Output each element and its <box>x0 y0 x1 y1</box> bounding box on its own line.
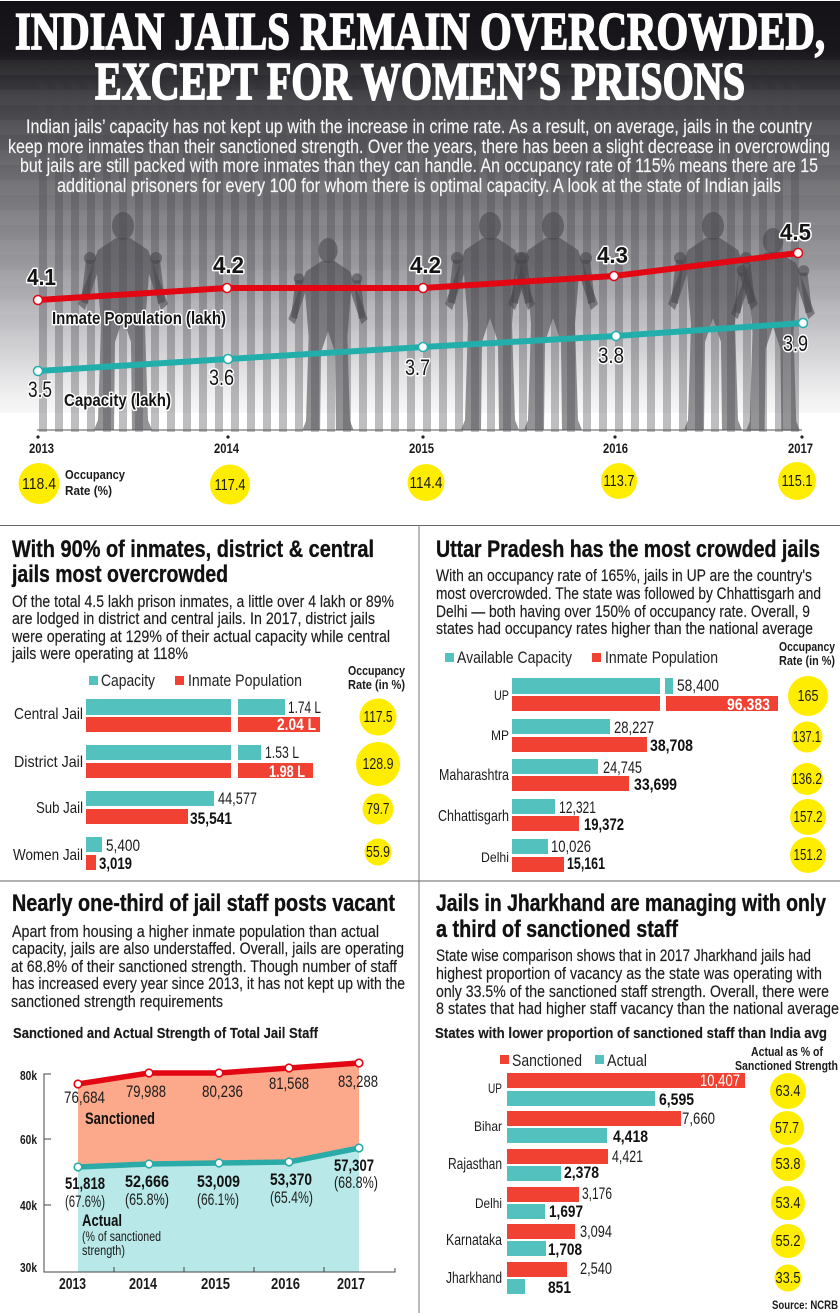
percentage header: Actual as % of <box>751 1044 824 1059</box>
line: capacity: 3.9 <box>783 331 808 356</box>
bar chart: states occupancy: Chhattisgarh <box>438 808 509 825</box>
occupancy circles: 137.1 <box>793 729 821 746</box>
bar chart: state staff: 7,660 <box>682 1110 715 1128</box>
time axis: 2015 <box>409 440 434 456</box>
occupancy rate circles: 113.7 <box>604 473 635 490</box>
line: inmate population: 4.5 <box>780 219 811 245</box>
percentage circles: 53.4 <box>776 1195 801 1212</box>
area line chart: staff strength: 80k <box>20 1069 37 1083</box>
legend <box>89 672 302 690</box>
occupancy circles: 128.9 <box>362 756 394 773</box>
bar chart: states occupancy: Delhi <box>481 849 509 865</box>
bar chart: jail types: 1.98 L <box>269 763 305 781</box>
area line chart: staff strength: 2014 <box>129 1276 157 1293</box>
line: capacity: 3.8 <box>598 343 624 368</box>
area line chart: staff strength: 2017 <box>337 1276 365 1293</box>
line: inmate population: 4.3 <box>597 242 628 268</box>
occupancy circles: 151.2 <box>794 847 823 864</box>
bar chart: jail types: 2.04 L <box>277 716 316 734</box>
bar chart: states occupancy <box>438 677 778 873</box>
percentage circles: 57.7 <box>775 1120 799 1137</box>
title <box>15 3 825 111</box>
legend: Capacity <box>101 672 156 690</box>
prisoner silhouettes <box>78 212 815 431</box>
occupancy rate circles: 115.1 <box>782 473 813 490</box>
percentage circles <box>770 1073 806 1292</box>
body text: sanctioned strength requirements <box>11 993 223 1011</box>
occupancy circles: 79.7 <box>366 801 390 818</box>
area line chart: staff strength: 40k <box>20 1199 37 1213</box>
area line chart: staff strength: (65.8%) <box>125 1191 169 1209</box>
bar chart: state staff: 3,094 <box>580 1223 612 1241</box>
body text: capacity, jails are also understaffed. Overall, jails are operating <box>12 940 404 958</box>
body text <box>11 923 405 1011</box>
area line chart: staff strength: 2015 <box>201 1276 230 1293</box>
legend: Available Capacity <box>457 649 573 667</box>
area line chart: staff strength: 81,568 <box>269 1075 309 1093</box>
occupancy header: Occupancy <box>348 663 406 678</box>
bar chart: states occupancy: 19,372 <box>584 816 624 834</box>
occupancy rate circles: 118.4 <box>22 476 56 493</box>
percentage circles: 55.2 <box>776 1233 801 1250</box>
area line chart: staff strength: (66.1%) <box>197 1191 239 1209</box>
panel: Uttar Pradesh <box>436 536 836 873</box>
percentage header <box>735 1044 838 1073</box>
bar chart: jail types <box>13 699 321 873</box>
bar chart: states occupancy: 15,161 <box>567 855 605 873</box>
bar chart: state staff: 10,407 <box>700 1072 740 1090</box>
body text: has increased every year since 2013, it has not kept up with the <box>12 975 405 993</box>
heading <box>11 536 374 588</box>
legend: Sanctioned <box>512 1052 582 1070</box>
bar chart: jail types: 44,577 <box>218 790 257 808</box>
area line chart: staff strength: (65.4%) <box>270 1189 313 1207</box>
occupancy circles: 55.9 <box>366 844 390 861</box>
bar chart: states occupancy: 58,400 <box>677 677 719 695</box>
bar chart: state staff: Bihar <box>474 1118 502 1134</box>
panel: Jharkhand staff <box>435 890 839 1312</box>
line: inmate population: 4.1 <box>27 264 56 290</box>
area line chart: staff strength: 79,988 <box>126 1083 166 1101</box>
body text <box>436 567 821 638</box>
occupancy rate circles: 117.4 <box>214 477 246 494</box>
occupancy header <box>779 639 836 668</box>
area line chart: staff strength: (% of sanctioned <box>82 1229 161 1244</box>
area line chart: staff strength: 83,288 <box>338 1073 378 1091</box>
occupancy rate circles: Rate (%) <box>65 483 112 498</box>
body text: were operating at 129% of their actual capacity while central <box>11 628 390 646</box>
bar chart: jail types: 3,019 <box>99 855 132 873</box>
legend: Inmate Population <box>605 649 718 667</box>
percentage circles: 63.4 <box>776 1083 801 1100</box>
area line chart: staff strength: 57,307 <box>334 1157 374 1175</box>
panel: header with jail background and trend chart <box>0 1 840 504</box>
line: capacity: 3.7 <box>405 355 430 380</box>
bar chart: state staff: 4,418 <box>613 1128 648 1146</box>
body text: at 68.8% of their sanctioned strength. Though number of staff <box>11 958 397 976</box>
area line chart: staff strength: 80,236 <box>202 1083 243 1101</box>
prison bars <box>39 150 799 432</box>
bar chart: states occupancy: 28,227 <box>614 719 654 737</box>
area line chart: staff strength: 2016 <box>271 1276 300 1293</box>
panel dividers <box>0 525 840 1313</box>
bar chart: state staff: 1,697 <box>549 1203 583 1221</box>
heading <box>436 890 827 943</box>
line: capacity: 3.5 <box>28 377 52 402</box>
bar chart: jail types: 1.53 L <box>265 744 299 762</box>
area line chart: staff strength: 30k <box>20 1261 37 1275</box>
occupancy circles: 117.5 <box>364 709 393 726</box>
bar chart: state staff: UP <box>488 1080 502 1096</box>
area line chart: staff strength: (68.8%) <box>334 1174 378 1192</box>
bar chart: state staff: 1,708 <box>548 1241 582 1259</box>
bar chart: states occupancy: 96,383 <box>727 696 770 714</box>
heading: a third of sanctioned staff <box>436 916 679 943</box>
body text: are lodged in district and central jails. In 2017, district jails <box>12 610 375 628</box>
heading: Nearly one-third of jail staff posts vacant <box>12 890 395 917</box>
bar chart: jail types: Sub Jail <box>36 800 83 817</box>
line: inmate population: 4.2 <box>213 252 244 278</box>
bar chart: states occupancy: 33,699 <box>634 776 677 794</box>
area line chart: staff strength: 51,818 <box>65 1175 105 1193</box>
occupancy circles <box>356 698 400 866</box>
bar chart: state staff: Delhi <box>475 1195 502 1211</box>
occupancy header <box>348 663 406 692</box>
heading: jails most overcrowded <box>11 561 228 588</box>
time axis: 2016 <box>603 440 628 456</box>
line: capacity: 3.6 <box>209 365 234 390</box>
bar chart: states occupancy: 10,026 <box>551 838 591 856</box>
line: inmate population: Inmate Population (lakh) <box>52 308 226 328</box>
bar chart: jail types: Central Jail <box>14 706 83 723</box>
heading: With 90% of inmates, district & central <box>12 536 374 563</box>
bar chart: state staff: 2,378 <box>564 1164 599 1182</box>
bar chart: state staff: 4,421 <box>612 1148 643 1166</box>
bar chart: jail types: Women Jail <box>13 847 83 864</box>
occupancy header: Rate (in %) <box>348 677 405 692</box>
area line chart: staff strength: 53,009 <box>197 1173 240 1191</box>
legend <box>500 1052 647 1070</box>
area line chart: staff strength: 53,370 <box>270 1171 312 1189</box>
occupancy rate circles: Occupancy <box>65 467 126 482</box>
bar chart: jail types: 5,400 <box>106 837 140 855</box>
bar chart: state staff: Karnataka <box>446 1232 502 1249</box>
area line chart: staff strength <box>20 1059 395 1293</box>
bar chart: state staff: 851 <box>548 1279 571 1297</box>
time axis: 2017 <box>788 440 813 456</box>
time axis: 2014 <box>214 440 239 456</box>
bar chart: state staff: Rajasthan <box>448 1156 502 1173</box>
area line chart: staff strength: Actual <box>82 1212 122 1230</box>
body text: Of the total 4.5 lakh prison inmates, a little over 4 lakh or 89% <box>12 593 394 611</box>
line: inmate population <box>27 219 811 328</box>
legend: Inmate Population <box>188 672 302 690</box>
bar chart: states occupancy: UP <box>494 687 509 703</box>
intro text <box>8 117 830 197</box>
line: inmate population: 4.2 <box>410 252 441 278</box>
bar chart: state staff: 2,540 <box>580 1260 612 1278</box>
area line chart: staff strength: strength) <box>82 1243 125 1258</box>
panel: jail staff vacancies <box>11 890 405 1293</box>
body text: jails were operating at 118% <box>11 645 188 663</box>
percentage circles: 33.5 <box>776 1270 801 1287</box>
time axis <box>29 430 813 456</box>
bar chart: state staff <box>446 1072 745 1297</box>
body text <box>11 593 394 663</box>
area line chart: staff strength: 2013 <box>59 1276 86 1293</box>
occupancy circles: 165 <box>798 688 819 705</box>
bar chart: state staff: Jharkhand <box>446 1270 502 1287</box>
legend <box>445 649 718 667</box>
area line chart: staff strength: 52,666 <box>125 1173 169 1191</box>
bar chart: states occupancy: 38,708 <box>650 737 693 755</box>
area line chart: staff strength: 76,684 <box>64 1089 105 1107</box>
bar chart: states occupancy: Maharashtra <box>439 767 509 784</box>
line: capacity <box>28 318 808 410</box>
time axis: 2013 <box>29 440 54 456</box>
occupancy circles: 157.2 <box>794 809 823 826</box>
panel: district and central jails <box>11 536 406 873</box>
body text: Apart from housing a higher inmate population than actual <box>12 923 379 941</box>
legend: Actual <box>607 1052 647 1070</box>
percentage circles: 53.8 <box>776 1156 801 1173</box>
area line chart: staff strength: 60k <box>20 1133 37 1147</box>
bar chart: states occupancy: 12,321 <box>559 799 596 817</box>
bar chart: state staff: 3,176 <box>582 1185 612 1203</box>
line: capacity: Capacity (lakh) <box>64 390 171 410</box>
occupancy circles: 136.2 <box>792 771 822 788</box>
body text <box>436 947 839 1018</box>
bar chart: state staff: 6,595 <box>659 1091 694 1109</box>
occupancy circles <box>788 676 828 873</box>
bar chart: states occupancy: 24,745 <box>603 759 642 777</box>
bar chart: jail types: 1.74 L <box>288 699 321 717</box>
occupancy rate circles <box>18 462 816 504</box>
bar chart: states occupancy: MP <box>491 727 509 743</box>
area line chart: staff strength: Sanctioned <box>85 1110 155 1128</box>
occupancy rate circles: 114.4 <box>410 475 443 492</box>
chart subheading: Sanctioned and Actual Strength of Total Jail Staff <box>13 1025 319 1042</box>
area line chart: staff strength: (67.6%) <box>65 1193 105 1211</box>
bar chart: jail types: District Jail <box>14 754 83 771</box>
bar chart: jail types: 35,541 <box>190 810 232 828</box>
